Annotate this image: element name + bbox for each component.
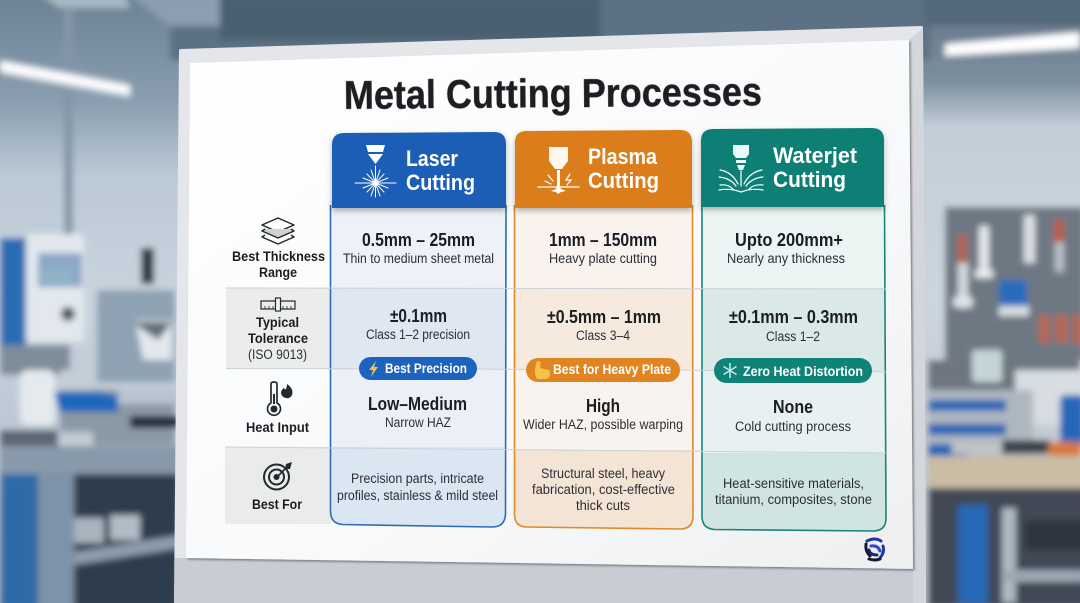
- icon: target with arrow: [264, 462, 292, 490]
- badge: best for heavy plate: [526, 358, 680, 382]
- icon: plasma torch: [538, 147, 579, 194]
- row label: best for: Best For: [252, 497, 303, 512]
- thickness value: Upto 200mm+: [735, 230, 843, 250]
- tolerance value: Class 3–4: [576, 328, 630, 343]
- icon: swirl logo: [866, 539, 884, 560]
- best for text: Heat-sensitive materials,: [723, 476, 864, 491]
- icon: laser beam: [355, 145, 396, 197]
- laser header: [332, 132, 506, 208]
- tolerance value: ±0.1mm – 0.3mm: [729, 307, 858, 327]
- laser header: Laser: [406, 146, 458, 171]
- heat input value: [368, 394, 467, 430]
- waterjet header: [701, 128, 884, 207]
- waterjet header: Cutting: [773, 167, 846, 192]
- badge: best for heavy plate: Best for Heavy Plate: [553, 362, 671, 377]
- plasma header: Plasma: [588, 144, 658, 169]
- display board frame: [174, 26, 926, 603]
- row label: typical tolerance: Tolerance: [248, 331, 308, 346]
- icon: thermometer and flame: [268, 382, 292, 415]
- waterjet body: [700, 200, 888, 533]
- row label: typical tolerance: (ISO 9013): [248, 347, 307, 362]
- badge: zero heat distortion: [714, 358, 872, 383]
- row label: typical tolerance: [248, 298, 308, 362]
- waterjet header: Waterjet: [773, 143, 858, 168]
- best for text: profiles, stainless & mild steel: [337, 488, 498, 503]
- row label: heat input: Heat Input: [246, 420, 309, 435]
- tolerance value: ±0.1mm: [390, 306, 447, 326]
- tolerance value: Class 1–2 precision: [366, 327, 470, 342]
- heat input value: [523, 396, 683, 432]
- best for text: [715, 476, 872, 507]
- heat input value: [735, 397, 851, 434]
- tolerance value: Class 1–2: [766, 329, 820, 344]
- row label: typical tolerance: Typical: [256, 315, 299, 330]
- thickness value: 1mm – 150mm: [549, 230, 657, 250]
- best for text: titanium, composites, stone: [715, 492, 872, 507]
- tolerance value: [547, 307, 661, 343]
- best for text: [337, 471, 498, 503]
- row label: best thickness range: Range: [259, 265, 297, 280]
- thickness value: Thin to medium sheet metal: [343, 251, 494, 266]
- thickness value: 0.5mm – 25mm: [362, 230, 475, 250]
- thickness value: Nearly any thickness: [727, 251, 845, 266]
- title: Metal Cutting Processes: [344, 70, 762, 118]
- tolerance value: [366, 306, 470, 342]
- badge: best precision: [359, 357, 477, 380]
- heat input value: Low–Medium: [368, 394, 467, 414]
- thickness value: [343, 230, 494, 266]
- best for text: thick cuts: [576, 498, 630, 513]
- heat input value: Wider HAZ, possible warping: [523, 417, 683, 432]
- tolerance value: [729, 307, 858, 344]
- plasma body: [514, 200, 694, 532]
- tolerance value: ±0.5mm – 1mm: [547, 307, 661, 327]
- heat input value: None: [773, 397, 813, 417]
- heat input value: Cold cutting process: [735, 419, 851, 434]
- best for text: Structural steel, heavy: [541, 466, 665, 481]
- panel: laser cutting column: [330, 132, 506, 529]
- plasma header: Cutting: [588, 168, 659, 193]
- row label: best for: [252, 462, 303, 512]
- paper sheet: [186, 40, 913, 569]
- laser body: [330, 200, 506, 529]
- thickness value: [549, 230, 657, 266]
- laser header: Cutting: [406, 170, 475, 195]
- best for text: Precision parts, intricate: [351, 471, 484, 486]
- heat input value: Narrow HAZ: [385, 415, 451, 430]
- badge: best precision: Best Precision: [385, 361, 467, 376]
- row label: best thickness range: Best Thickness: [232, 249, 325, 264]
- icon: stacked layers: [262, 218, 294, 244]
- badge: zero heat distortion: Zero Heat Distortion: [743, 364, 863, 379]
- panel: plasma cutting column: [514, 130, 694, 532]
- icon: caliper ruler: [261, 298, 295, 311]
- panel: waterjet cutting column: [700, 128, 888, 533]
- row label: heat input: [246, 382, 309, 435]
- thickness value: [727, 230, 845, 266]
- thickness value: Heavy plate cutting: [549, 251, 657, 266]
- row label shading: [225, 288, 331, 524]
- best for text: [532, 466, 675, 513]
- row label: best thickness range: [232, 218, 325, 280]
- icon: waterjet nozzle: [719, 145, 763, 192]
- plasma header: [515, 130, 692, 208]
- best for text: fabrication, cost-effective: [532, 482, 675, 497]
- heat input value: High: [586, 396, 620, 416]
